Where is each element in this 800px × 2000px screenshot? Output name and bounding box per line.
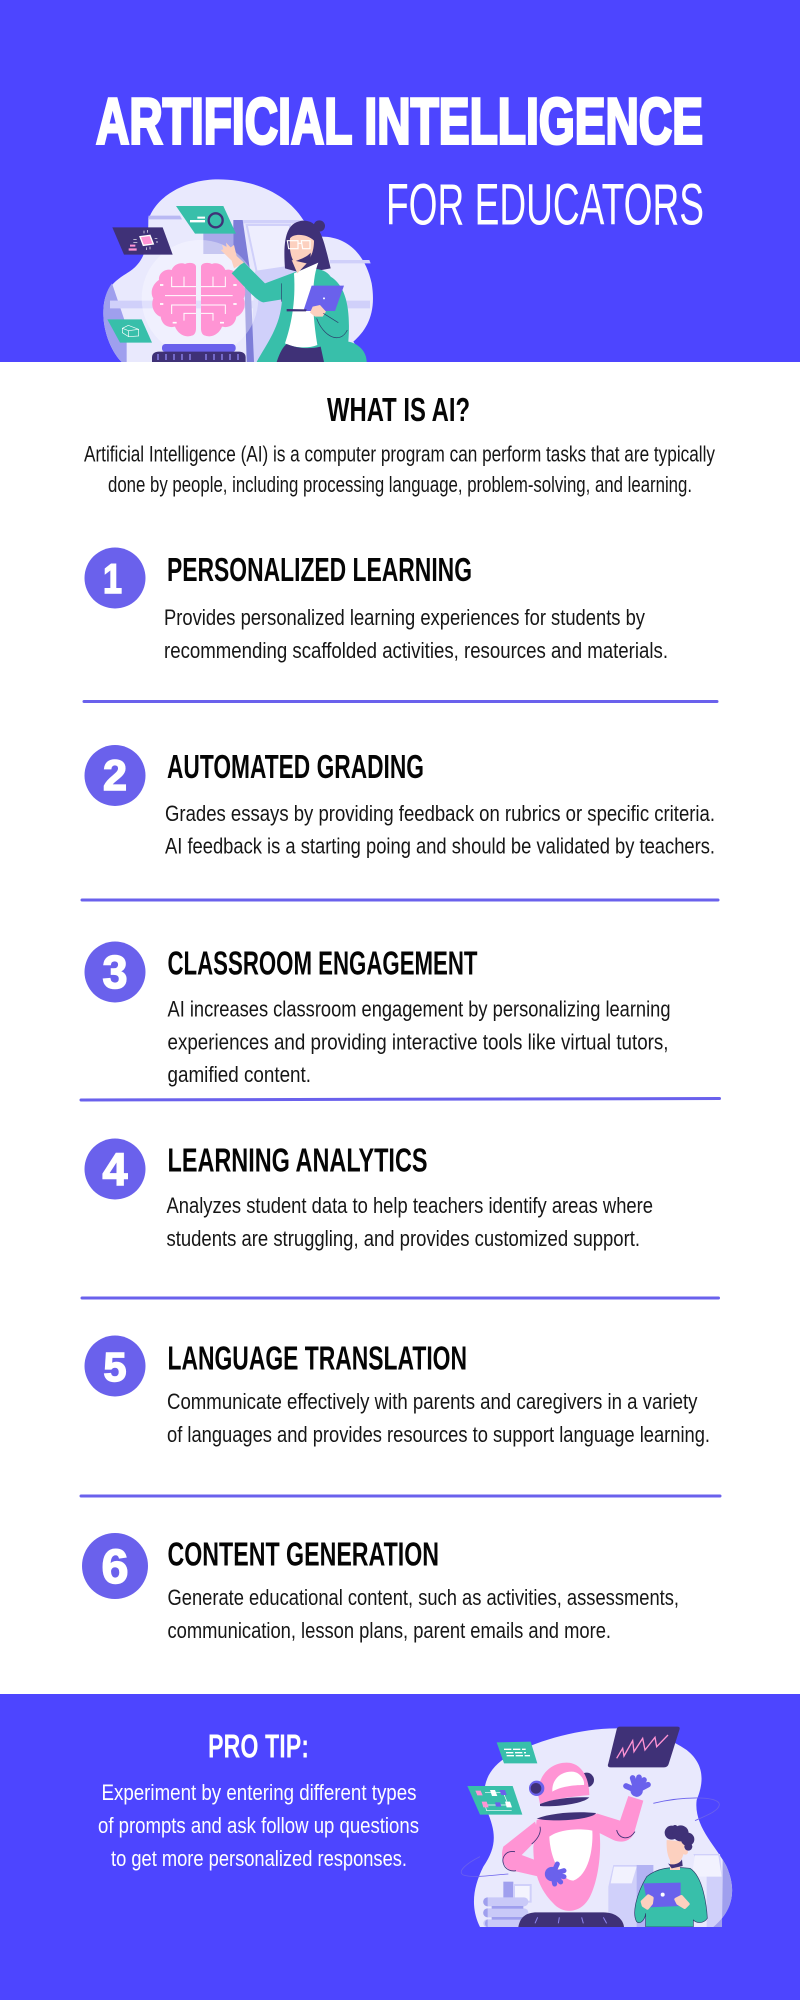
body 6: communication, lesson plans, parent emails and more. bbox=[168, 1618, 611, 1643]
heading: what is AI: WHAT IS AI? bbox=[327, 391, 470, 428]
hair bbox=[665, 1825, 694, 1851]
text: pro tip body: of prompts and ask follow up questions bbox=[98, 1813, 419, 1838]
right hand bbox=[626, 1777, 648, 1794]
teacher bbox=[221, 220, 367, 362]
neck bbox=[670, 1860, 680, 1870]
number badge 4 bbox=[84, 1138, 146, 1200]
collar bbox=[537, 1812, 596, 1820]
body 3: gamified content. bbox=[168, 1062, 311, 1087]
blob background bbox=[474, 1728, 732, 1927]
text: AI definition bbox=[84, 442, 716, 497]
body 3: AI increases classroom engagement by personalizing learning bbox=[168, 996, 670, 1022]
glasses bbox=[287, 241, 310, 249]
belly bbox=[549, 1829, 592, 1881]
raised hand bbox=[221, 243, 244, 268]
illustration: teacher with AI brain bbox=[103, 179, 373, 362]
hair bbox=[314, 220, 325, 232]
background machines bbox=[483, 1854, 732, 1927]
left arm bbox=[502, 1822, 537, 1876]
face bbox=[667, 1840, 685, 1864]
number badge 6: 6 bbox=[102, 1541, 128, 1594]
number badge 2: 2 bbox=[103, 752, 127, 800]
heading 2: AUTOMATED GRADING bbox=[167, 748, 424, 785]
laptop bbox=[303, 286, 344, 311]
number badge 5 bbox=[84, 1336, 146, 1396]
body 3: experiences and providing interactive tools like virtual tutors, bbox=[168, 1030, 668, 1054]
section 3: classroom engagement bbox=[84, 942, 670, 1087]
robot bbox=[502, 1763, 648, 1911]
head bbox=[538, 1763, 589, 1804]
heading 3: CLASSROOM ENGAGEMENT bbox=[168, 944, 478, 982]
brain base bbox=[152, 344, 246, 362]
brain bbox=[152, 263, 245, 336]
number badge 5: 5 bbox=[104, 1344, 126, 1390]
screen: chart ring bbox=[176, 206, 236, 234]
screen: chip bbox=[112, 227, 173, 255]
body 6: Generate educational content, such as activities, assessments, bbox=[168, 1585, 679, 1610]
text: pro tip body bbox=[98, 1780, 419, 1871]
right arm bbox=[597, 1796, 643, 1842]
body 1 bbox=[164, 605, 668, 663]
body 3 bbox=[168, 996, 670, 1087]
heading 1: PERSONALIZED LEARNING bbox=[167, 551, 472, 588]
body 1: recommending scaffolded activities, resources and materials. bbox=[164, 638, 668, 663]
number badge 6 bbox=[82, 1533, 148, 1599]
section 1: personalized learning bbox=[84, 548, 668, 663]
section 6: content generation bbox=[82, 1533, 679, 1643]
tracks bbox=[518, 1912, 624, 1927]
number badge 4: 4 bbox=[102, 1144, 128, 1195]
orbit lines bbox=[461, 1798, 719, 1876]
hand on laptop bbox=[310, 305, 326, 317]
body 4 bbox=[166, 1193, 653, 1251]
tablet bbox=[643, 1883, 681, 1907]
screen: zigzag chart bbox=[608, 1727, 680, 1767]
body 4: Analyzes student data to help teachers identify areas where bbox=[166, 1193, 653, 1218]
heading 4: LEARNING ANALYTICS bbox=[168, 1142, 428, 1178]
number badge 3 bbox=[84, 942, 146, 1002]
body 5: Communicate effectively with parents and caregivers in a variety bbox=[167, 1389, 698, 1414]
face bbox=[290, 234, 314, 261]
man with tablet bbox=[635, 1825, 707, 1927]
number badge 1: 1 bbox=[103, 555, 122, 602]
text: pro tip body: Experiment by entering different types bbox=[102, 1780, 416, 1805]
heading: pro tip: PRO TIP: bbox=[208, 1728, 309, 1764]
panel: header bbox=[0, 0, 800, 362]
section 4: learning analytics bbox=[84, 1138, 653, 1251]
illustration: robot and man bbox=[461, 1727, 732, 1927]
hands bbox=[642, 1896, 688, 1908]
panel: pro tip footer bbox=[0, 1694, 800, 2000]
coat bbox=[635, 1867, 707, 1927]
body 5 bbox=[167, 1389, 710, 1447]
body 2 bbox=[165, 801, 715, 858]
body bbox=[533, 1813, 600, 1911]
number badge 1 bbox=[84, 548, 146, 608]
number badge 3: 3 bbox=[102, 946, 128, 998]
body 1: Provides personalized learning experiences for students by bbox=[164, 605, 646, 630]
screen: flow diagram bbox=[467, 1786, 522, 1815]
glass dome bbox=[142, 240, 258, 334]
shirt bbox=[285, 263, 318, 347]
number badge 2 bbox=[84, 745, 146, 806]
coat bbox=[232, 262, 367, 362]
screen: cube bbox=[107, 319, 152, 343]
body 6 bbox=[168, 1585, 679, 1643]
text: pro tip body: to get more personalized responses. bbox=[111, 1846, 407, 1871]
section 2: automated grading bbox=[84, 745, 715, 858]
body 4: students are struggling, and provides customized support. bbox=[166, 1226, 640, 1251]
screen: text lines bbox=[497, 1742, 537, 1763]
ear bbox=[584, 1772, 594, 1787]
section 5: language translation bbox=[84, 1336, 710, 1447]
heading 6: CONTENT GENERATION bbox=[168, 1536, 439, 1572]
heading 5: LANGUAGE TRANSLATION bbox=[168, 1340, 467, 1376]
left hand bbox=[547, 1864, 564, 1884]
pants bbox=[277, 344, 324, 362]
